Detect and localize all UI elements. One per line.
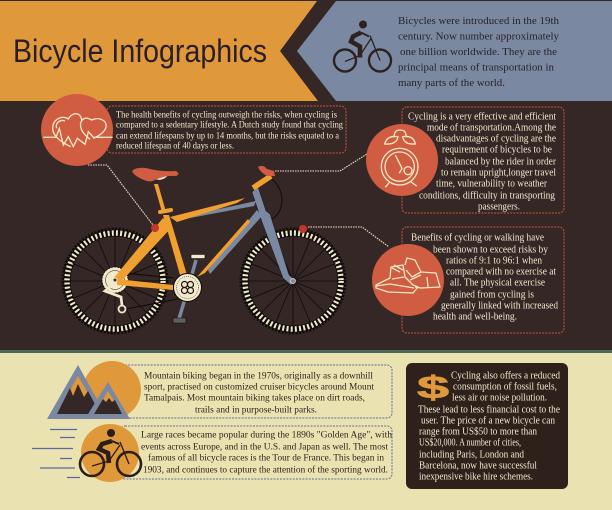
title: Bicycle Infographics <box>13 33 267 69</box>
down tube <box>197 210 262 277</box>
intro text: many parts of the world. <box>398 77 505 89</box>
brake cable <box>268 179 282 222</box>
panel: exercise benefits <box>372 227 564 333</box>
crank and derailleur <box>105 278 126 312</box>
panel: cost of cycling <box>406 363 568 489</box>
text: health: can extend lifespans by up to 14 months, but the risks equated to a <box>116 130 340 142</box>
text: cost: including Paris, London and <box>419 450 524 460</box>
icon: cyclist <box>334 20 391 72</box>
text: exercise: health and well-being. <box>433 312 517 322</box>
text: health: reduced lifespan of 40 days or less. <box>116 140 234 152</box>
text: exercise: gained from cycling is <box>450 290 534 300</box>
chain <box>124 273 178 309</box>
text: cost: range from US$50 to more than <box>419 426 537 438</box>
panel: health benefits <box>41 94 346 166</box>
text: exercise: generally linked with increased <box>441 300 558 312</box>
dashed box <box>120 365 392 418</box>
header banner <box>0 1 612 101</box>
text: health: The health benefits of cycling outweigh the risks, when cycling is <box>116 110 337 120</box>
top tube <box>170 198 256 222</box>
icon: mountains <box>47 365 130 419</box>
text: cost: less air or noise pollution. <box>452 392 547 404</box>
text: cost: These lead to less financial cost to the <box>418 404 561 416</box>
dark box <box>406 363 568 489</box>
text: efficiency: to remain upright,longer travel <box>441 168 556 178</box>
text: mountain biking: Tamalpais. Most mountain biking takes place on dirt roads, <box>144 392 365 404</box>
text: efficiency: requirement of bicycles to be <box>442 144 553 156</box>
icon circle <box>81 424 139 482</box>
icon: dollar sign: $ <box>417 369 449 405</box>
rear cassette <box>102 267 128 293</box>
front wheel <box>241 229 345 333</box>
chainring <box>174 274 202 302</box>
intro text: principal means of transportation in <box>398 62 554 74</box>
rear wheel <box>63 229 167 333</box>
text: health: compared to a sedentary lifestyle. A Dutch study found that cycling <box>116 120 343 130</box>
icon circle <box>372 244 444 316</box>
kickstand <box>173 254 205 323</box>
text: races <box>141 430 392 476</box>
text: mountain biking <box>144 370 374 416</box>
text: mountain biking: sport, practised on customized cruiser bicycles around Mount <box>144 382 374 392</box>
seat post and seat tube <box>154 184 187 275</box>
text: exercise: compared with no exercise at <box>446 266 556 278</box>
text: cost: Barcelona, now have successful <box>419 460 537 472</box>
intro text: century. Now number approximately <box>398 30 559 42</box>
dashed box <box>107 106 346 153</box>
icon: sun <box>83 361 141 419</box>
text: efficiency: disadvantages of cycling are the <box>436 134 557 144</box>
text: efficiency <box>408 112 557 212</box>
icon: sneakers <box>376 258 440 293</box>
title banner <box>0 1 318 101</box>
text: cost: user. The price of a new bicycle can <box>421 416 555 426</box>
text: cost: inexpensive bike hire schemes. <box>419 472 533 482</box>
panel: races <box>32 424 392 482</box>
dashed box <box>120 426 392 479</box>
icon: hearts with pulse <box>43 114 113 147</box>
text: efficiency: passengers. <box>478 202 520 212</box>
text: cost <box>418 370 561 482</box>
intro text: one billion worldwide. They are the <box>400 46 557 58</box>
stem and handlebar <box>253 166 275 188</box>
text: exercise: all. The physical exercise <box>450 278 546 288</box>
text: cost: Cycling also offers a reduced <box>451 370 560 382</box>
text: health <box>116 110 343 152</box>
front hub <box>290 278 296 284</box>
intro text <box>398 15 559 89</box>
text: races: famous of all bicycle races is the Tour de France. This began in <box>148 452 384 464</box>
saddle <box>132 168 178 182</box>
intro text: Bicycles were introduced in the 19th <box>398 15 559 27</box>
text: cost: consumption of fossil fuels, <box>453 382 557 392</box>
icon circle <box>41 94 113 166</box>
icon: racing cyclist <box>80 429 141 476</box>
text: efficiency: Cycling is a very effective and efficient <box>408 112 556 122</box>
text: efficiency: balanced by the rider in order <box>445 156 557 168</box>
panel: transportation efficiency <box>366 107 564 213</box>
text: exercise: ratios of 9:1 to 96:1 when <box>446 256 542 266</box>
fork <box>252 187 295 285</box>
text: races: events across Europe, and in the U.S. and Japan as well. The most <box>141 442 388 452</box>
icon: alarm clock <box>381 130 418 187</box>
dashed box <box>402 227 564 333</box>
text: races: 1903, and continues to capture the attention of the sporting world. <box>143 464 388 476</box>
lower section background <box>0 350 612 510</box>
text: cost: US$20,000. A number of cities, <box>419 438 521 448</box>
icon circle <box>366 124 438 196</box>
speed lines <box>32 430 80 478</box>
text: mountain biking: trails and in purpose-built parks. <box>195 404 317 416</box>
dashed box <box>402 107 564 213</box>
text: efficiency: conditions, difficulty in transporting <box>419 190 555 202</box>
text: exercise: Benefits of cycling or walking have <box>411 232 545 244</box>
callout dot <box>151 224 159 232</box>
bicycle illustration <box>63 166 345 333</box>
panel: mountain biking <box>47 361 392 419</box>
text: mountain biking: Mountain biking began in the 1970s, originally as a downhill <box>144 370 373 382</box>
text: races: Large races became popular during the 1890s "Golden Age", with <box>141 430 392 440</box>
text: exercise <box>411 232 558 322</box>
callout dot <box>299 225 307 233</box>
text: exercise: been shown to exceed risks by <box>433 244 548 256</box>
text: efficiency: mode of transportation.Among the <box>427 122 557 134</box>
rear stays <box>113 218 173 290</box>
callout leader lines <box>88 154 389 247</box>
text: efficiency: time, vulnerability to weather <box>436 178 548 190</box>
intro panel <box>297 1 612 101</box>
